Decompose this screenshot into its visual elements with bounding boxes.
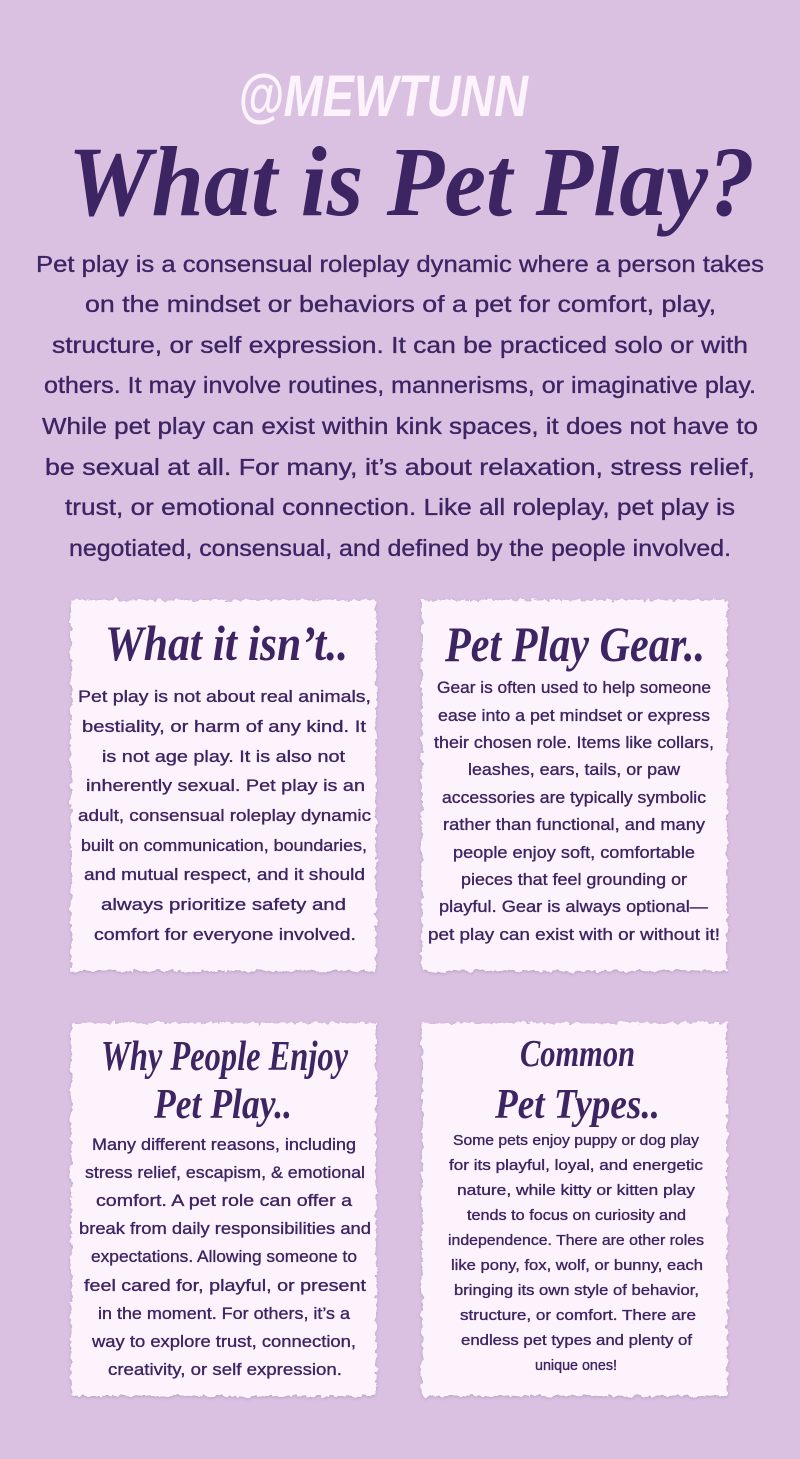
text: why people enjoy body: creativity, or self expression. — [108, 1360, 342, 1379]
heading: why people enjoy pet play — [101, 1034, 348, 1128]
intro paragraph: be sexual at all. For many, it’s about relaxation, stress relief, — [45, 454, 755, 480]
text: why people enjoy body: stress relief, escapism, & emotional — [85, 1163, 365, 1182]
text: gear body: rather than functional, and many — [443, 815, 706, 834]
intro paragraph: trust, or emotional connection. Like all roleplay, pet play is — [65, 494, 735, 520]
heading: why people enjoy pet play: Pet Play.. — [153, 1082, 292, 1128]
intro paragraph: negotiated, consensual, and defined by the people involved. — [69, 535, 731, 561]
panel: pet play gear — [422, 600, 727, 971]
text: gear body: their chosen role. Items like collars, — [434, 733, 714, 752]
text: common pet types body: Some pets enjoy puppy or dog play — [453, 1132, 700, 1149]
text: what it isn't body: inherently sexual. Pet play is an — [86, 776, 365, 795]
text: common pet types body: tends to focus on curiosity and — [467, 1207, 686, 1224]
text: common pet types body: for its playful, loyal, and energetic — [449, 1157, 704, 1174]
panel: common pet types — [422, 1023, 727, 1396]
text: common pet types body — [448, 1132, 704, 1374]
intro paragraph: Pet play is a consensual roleplay dynamic where a person takes — [36, 251, 764, 277]
text: common pet types body: like pony, fox, wolf, or bunny, each — [451, 1257, 703, 1274]
text: gear body: playful. Gear is always optional— — [439, 897, 708, 916]
text: gear body: pieces that feel grounding or — [461, 870, 687, 889]
text: why people enjoy body: in the moment. For others, it’s a — [98, 1304, 351, 1323]
text: gear body: leashes, ears, tails, or paw — [468, 760, 681, 779]
text: what it isn't body: always prioritize safety and — [101, 895, 346, 914]
text: why people enjoy body — [79, 1135, 371, 1379]
intro paragraph — [36, 251, 764, 561]
text: common pet types body: unique ones! — [535, 1357, 617, 1374]
heading: common pet types: Pet Types.. — [494, 1082, 660, 1128]
text: what it isn't body: is not age play. It is also not — [102, 747, 345, 766]
text: gear body: Gear is often used to help someone — [437, 678, 711, 697]
text: common pet types body: bringing its own style of behavior, — [454, 1282, 699, 1299]
text: what it isn't body: comfort for everyone involved. — [94, 925, 356, 944]
text: gear body: accessories are typically symbolic — [442, 788, 707, 807]
text: common pet types body: endless pet types and plenty of — [461, 1332, 693, 1349]
panel: why people enjoy pet play — [71, 1023, 376, 1396]
heading: what it isn't: What it isn’t.. — [105, 615, 348, 671]
intro paragraph: While pet play can exist within kink spaces, it does not have to — [42, 413, 758, 439]
text: what it isn't body: bestiality, or harm of any kind. It — [82, 717, 366, 736]
text: gear body — [428, 678, 720, 944]
heading: pet play gear: Pet Play Gear.. — [444, 616, 705, 672]
title: What is Pet Play? — [68, 126, 755, 237]
handle: @MEWTUNN: @MEWTUNN — [238, 64, 529, 129]
text: what it isn't body: adult, consensual roleplay dynamic — [78, 806, 372, 825]
intro paragraph: structure, or self expression. It can be practiced solo or with — [52, 332, 748, 358]
text: what it isn't body: built on communication, boundaries, — [81, 836, 367, 855]
text: common pet types body: structure, or comfort. There are — [460, 1307, 696, 1324]
text: common pet types body: nature, while kitty or kitten play — [457, 1182, 696, 1199]
heading: why people enjoy pet play: Why People Enjoy — [101, 1034, 348, 1080]
panel: what it isn't — [71, 600, 376, 971]
text: what it isn't body: Pet play is not about real animals, — [78, 687, 371, 706]
intro paragraph: others. It may involve routines, mannerisms, or imaginative play. — [44, 372, 756, 398]
text: gear body: pet play can exist with or without it! — [428, 925, 720, 944]
text: what it isn't body — [78, 687, 372, 944]
text: common pet types body: independence. There are other roles — [448, 1232, 704, 1249]
text: why people enjoy body: Many different reasons, including — [92, 1135, 356, 1154]
text: why people enjoy body: comfort. A pet role can offer a — [96, 1191, 353, 1210]
text: what it isn't body: and mutual respect, and it should — [84, 865, 365, 884]
heading: common pet types: Common — [520, 1033, 635, 1075]
text: gear body: ease into a pet mindset or express — [438, 706, 710, 725]
text: gear body: people enjoy soft, comfortable — [453, 843, 695, 862]
text: why people enjoy body: feel cared for, playful, or present — [84, 1276, 366, 1295]
intro paragraph: on the mindset or behaviors of a pet for comfort, play, — [85, 291, 716, 317]
text: why people enjoy body: way to explore trust, connection, — [91, 1332, 356, 1351]
text: why people enjoy body: expectations. Allowing someone to — [91, 1247, 357, 1266]
text: why people enjoy body: break from daily responsibilities and — [79, 1219, 371, 1238]
heading: common pet types — [494, 1033, 660, 1128]
